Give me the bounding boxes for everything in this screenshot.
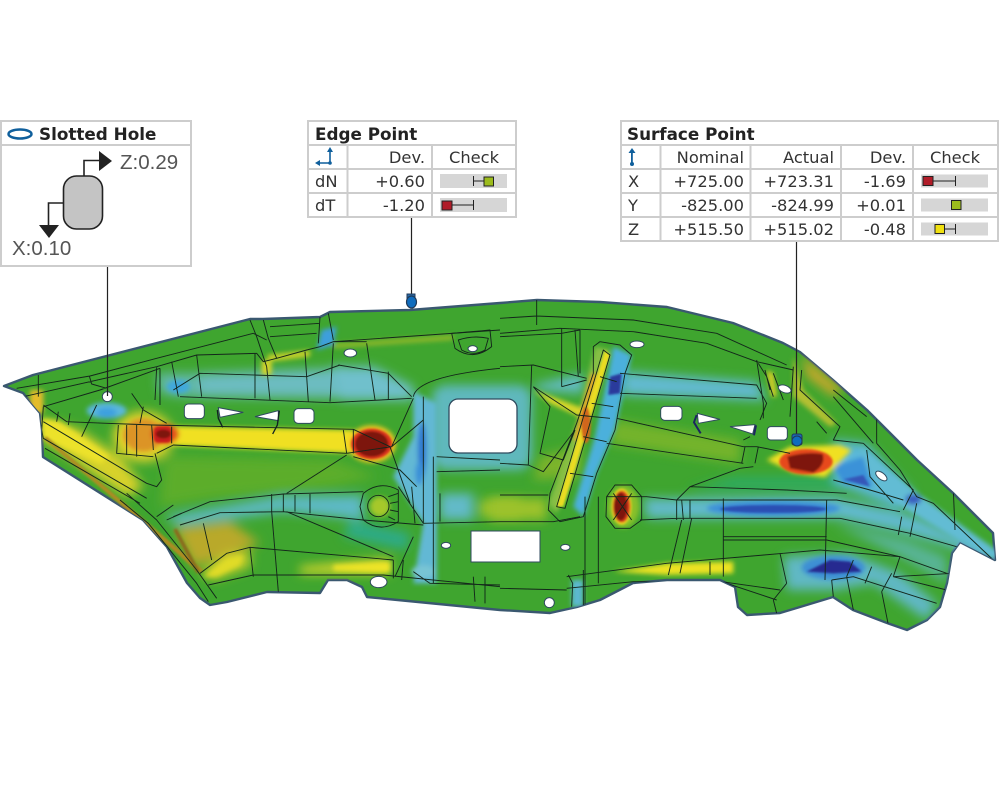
panel: edge point: -1.20	[383, 196, 425, 215]
panel: surface point: +515.50	[673, 220, 744, 239]
panel: surface point: +725.00	[673, 172, 744, 191]
panel: surface point: Check	[930, 148, 981, 167]
panel: surface point: +515.02	[763, 220, 834, 239]
panel: edge point: +0.60	[375, 172, 425, 191]
panel: surface point: +723.31	[763, 172, 834, 191]
panel: edge point	[308, 121, 516, 217]
panel: edge point: Dev.	[389, 148, 425, 167]
left half colours	[30, 327, 520, 583]
panel: surface point: Actual	[783, 148, 834, 167]
panel: surface point: -825.00	[681, 196, 744, 215]
holes	[102, 341, 889, 608]
hole: lower window	[471, 531, 540, 562]
icon: normal arrow	[628, 148, 636, 166]
panel: slotted hole	[1, 121, 191, 266]
panel: surface point: -0.48	[864, 220, 906, 239]
panel: edge point: Check	[449, 148, 500, 167]
panel: surface point: Dev.	[870, 148, 906, 167]
marker: surface point	[792, 434, 802, 446]
value: X: X:0.10	[12, 237, 71, 260]
hole: right slot group	[544, 341, 889, 608]
right half colours	[490, 347, 1000, 620]
marker: edge point	[406, 294, 416, 308]
leader lines	[108, 217, 796, 436]
icon: slot	[8, 130, 32, 138]
gauge: Y	[921, 198, 988, 212]
panel: surface point: X	[628, 172, 639, 191]
panel: edge point: dT	[315, 196, 335, 215]
gauge: dT	[440, 198, 507, 212]
value: Z: Z:0.29	[120, 151, 178, 174]
hole: centre window	[449, 399, 517, 453]
panel: surface point: Y	[627, 196, 638, 215]
gauge: X	[921, 174, 988, 188]
colour map fill	[17, 300, 1000, 625]
slot diagram	[39, 151, 112, 238]
panel body: deviation colour map	[4, 300, 1000, 630]
gauge: dN	[440, 174, 507, 188]
part outline	[4, 300, 995, 630]
heading: edge point: Edge Point	[315, 124, 417, 144]
gauge: Z	[921, 222, 988, 236]
panel: surface point: -824.99	[771, 196, 834, 215]
mesh lines left	[17, 313, 500, 603]
panel: surface point: -1.69	[864, 172, 906, 191]
panel: surface point: Z	[628, 220, 639, 239]
panel: surface point	[621, 121, 998, 241]
panel: surface point: Nominal	[677, 148, 744, 167]
panel: edge point: dN	[315, 172, 338, 191]
centre hole teal halo	[432, 385, 532, 470]
icon: axes	[315, 147, 333, 166]
mesh lines right	[500, 300, 993, 625]
heading: surface point: Surface Point	[627, 124, 755, 144]
hole: left slot group	[102, 346, 477, 588]
panel: surface point: +0.01	[856, 196, 906, 215]
heading: slotted hole: Slotted Hole	[39, 124, 156, 144]
